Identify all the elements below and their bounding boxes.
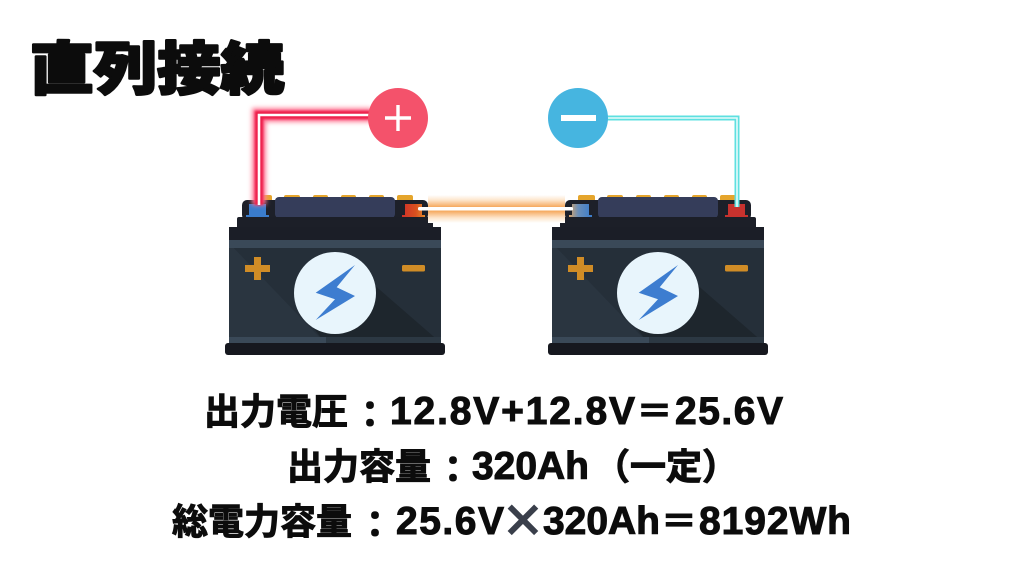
wire: cyan negative	[605, 118, 737, 207]
text: output voltage: 25.6V	[675, 390, 783, 433]
text: total capacity: 320Ah	[543, 500, 660, 543]
text: total capacity: ：	[357, 504, 393, 545]
icon: lightning disc	[294, 252, 376, 334]
text: output capacity: 出力容量	[287, 446, 431, 487]
text: output capacity	[287, 445, 738, 490]
text: total capacity	[172, 492, 851, 550]
text: output capacity: ：	[435, 449, 471, 490]
text: total capacity: ✕	[502, 492, 544, 550]
icon: minus mark	[402, 265, 425, 272]
icon: lightning disc	[617, 252, 699, 334]
text: output voltage: ：	[352, 394, 388, 435]
icon: minus mark	[725, 265, 748, 272]
icon: plus mark	[568, 257, 593, 280]
text: total capacity: 25.6V	[396, 500, 504, 543]
text: output voltage: 12.8V+12.8V	[390, 390, 635, 433]
terminal: plus circle	[368, 88, 428, 148]
text: total capacity: ＝	[661, 501, 697, 542]
text: output voltage: 出力電圧	[204, 391, 348, 432]
text: total capacity: 8192Wh	[699, 500, 851, 543]
text: output voltage	[204, 390, 783, 435]
battery: left	[225, 195, 445, 355]
text: output capacity: （一定）	[594, 446, 738, 487]
terminal: minus circle	[548, 88, 608, 148]
wire: red positive	[259, 115, 372, 205]
title: 直列接続	[30, 24, 284, 106]
text: output capacity: 320Ah	[472, 445, 589, 488]
icon: plus mark	[245, 257, 270, 280]
wire: orange series link	[418, 195, 573, 223]
battery: right	[548, 195, 768, 355]
text: total capacity: 総電力容量	[172, 501, 352, 542]
text: output voltage: ＝	[636, 391, 673, 432]
